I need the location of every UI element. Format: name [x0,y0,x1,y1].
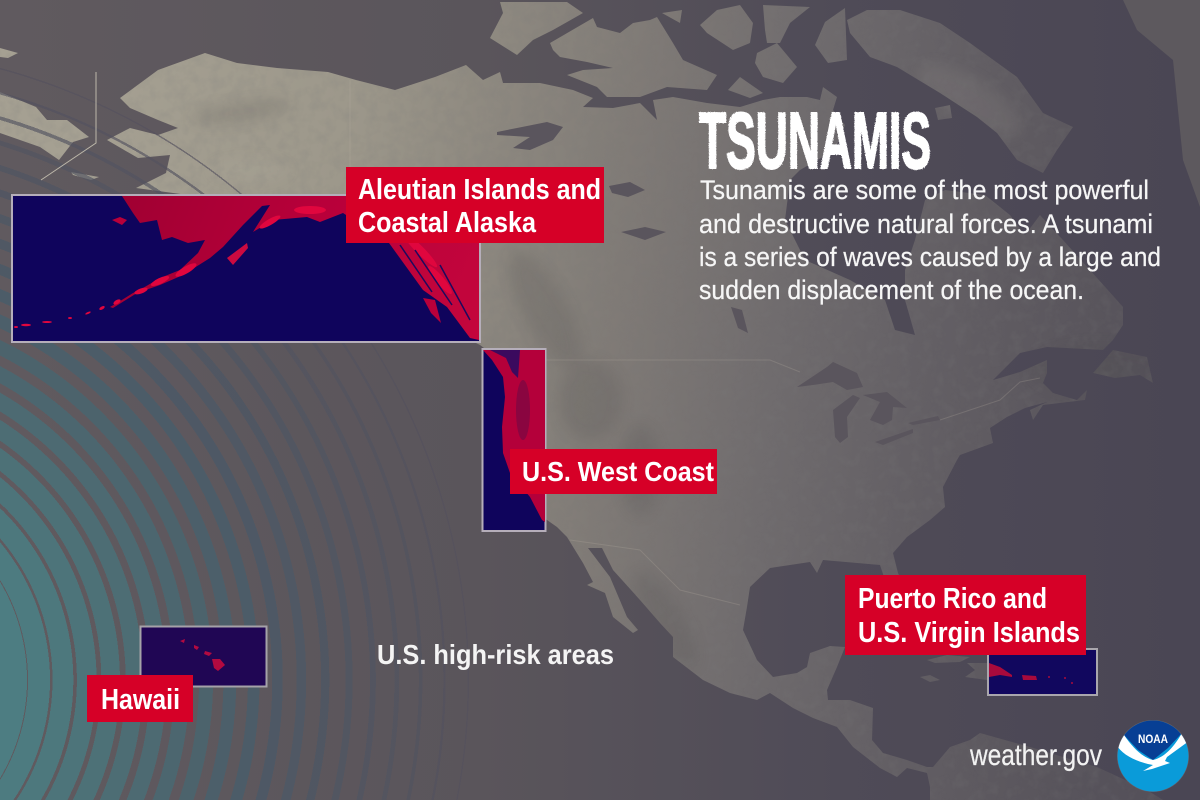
label: Puerto Rico and U.S. Virgin Islands: Puerto Rico and [858,583,1047,615]
borders [350,80,1040,605]
label: Hawaii: Hawaii [101,684,180,716]
intro text block: and destructive natural forces. A tsunami [699,209,1153,239]
source: weather.gov: weather.gov [969,739,1102,772]
title: TSUNAMIS [699,96,931,185]
label: Aleutian Islands and Coastal Alaska: Aleutian Islands and [358,174,601,206]
panel: Puerto Rico and U.S. Virgin Islands inset map [988,649,1097,695]
panel: Aleutian Islands and Coastal Alaska inset map [12,195,480,342]
intro text block: Tsunamis are some of the most powerful [700,175,1149,205]
lakes [497,122,940,445]
label: U.S. West Coast: U.S. West Coast [522,456,714,487]
panel: Hawaii inset map [140,626,266,686]
label: Hawaii [87,675,193,722]
icon: NOAA logo [1117,720,1189,792]
terrain shading [194,72,1014,656]
panel: U.S. West Coast inset map [482,349,546,531]
label: U.S. West Coast [510,449,717,494]
Greenland [1123,0,1200,207]
label: Aleutian Islands and Coastal Alaska [346,167,604,243]
leader line for the Aleutian inset [41,72,96,180]
label: Puerto Rico and U.S. Virgin Islands [845,575,1086,655]
icon: NOAA logo: NOAA [1138,734,1168,746]
intro text block [699,175,1161,305]
caption: U.S. high-risk areas: U.S. high-risk areas [377,639,614,670]
label: Puerto Rico and U.S. Virgin Islands: U.S. Virgin Islands [858,617,1080,649]
intro text block: sudden displacement of the ocean. [699,275,1084,305]
intro text block: is a series of waves caused by a large and [699,242,1161,272]
label: Aleutian Islands and Coastal Alaska: Coastal Alaska [358,207,537,239]
